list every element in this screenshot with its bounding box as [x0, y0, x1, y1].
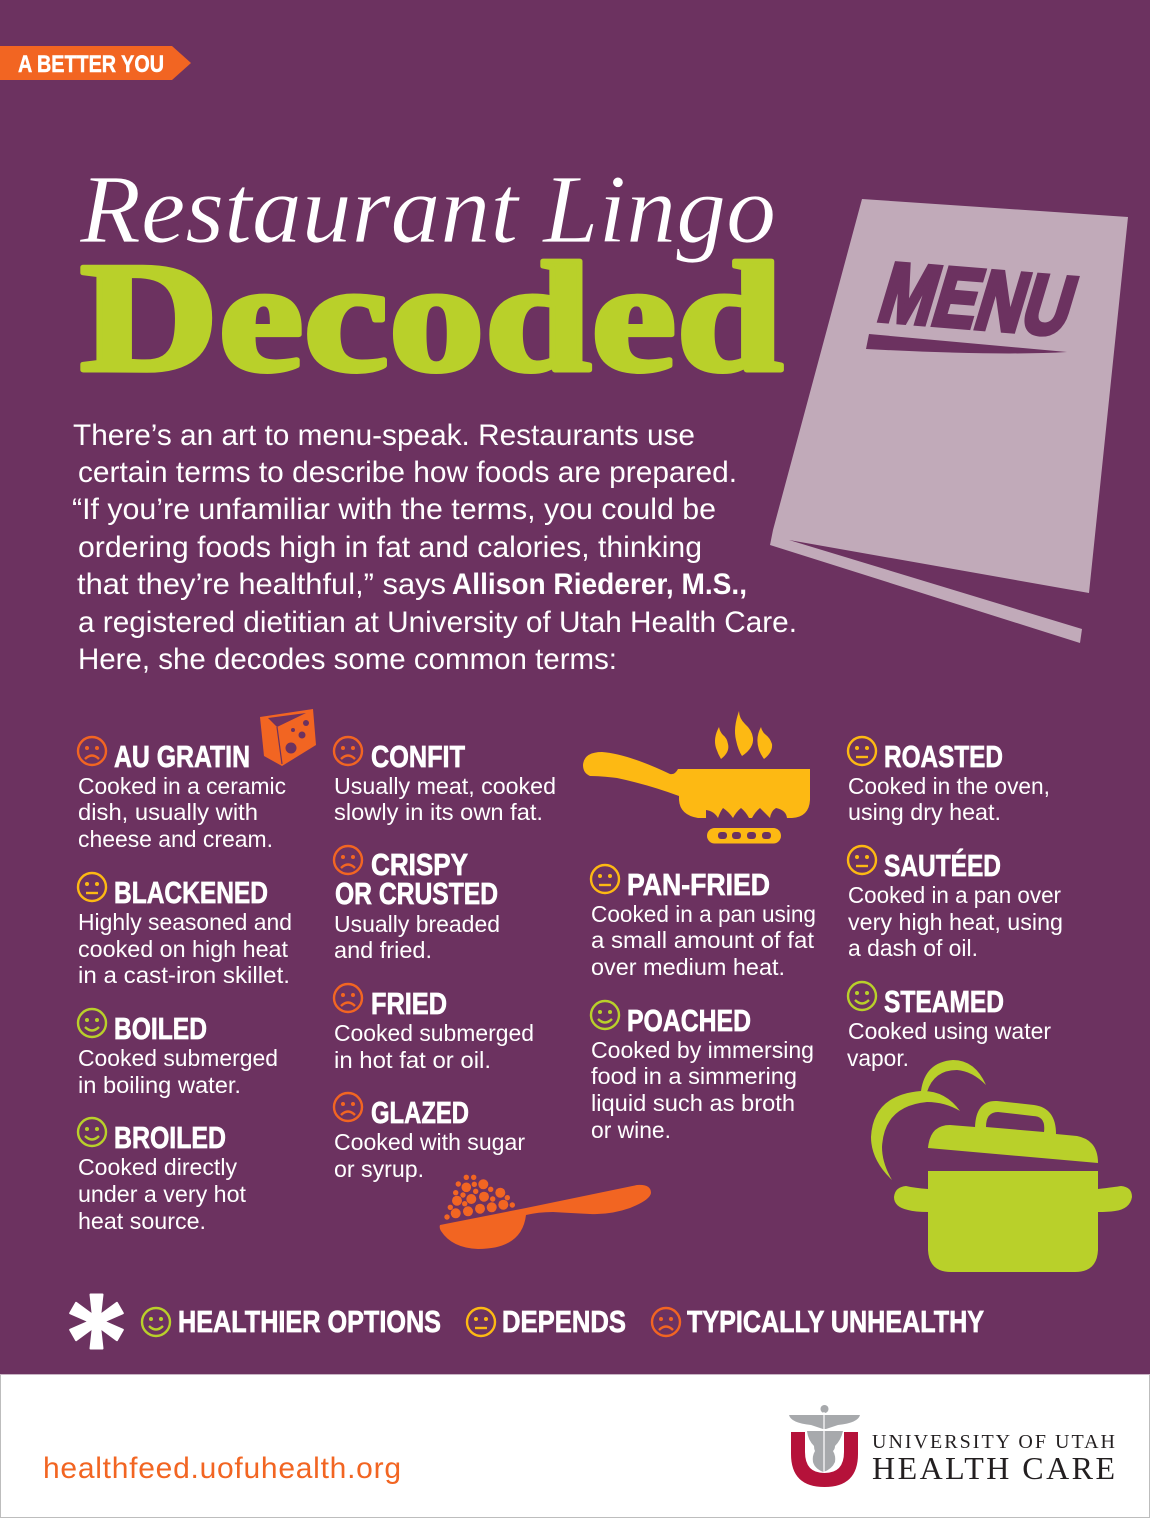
- term: Glazed: [334, 1093, 525, 1182]
- term: Au Gratin: Cooked in a ceramic: [78, 773, 286, 799]
- term: Broiled: Cooked directly: [78, 1154, 237, 1180]
- term: Sauteed: [848, 846, 1063, 961]
- term: Sauteed: Cooked in a pan over: [848, 882, 1061, 908]
- legend: healthier options: HEALTHIER OPTIONS: [178, 1304, 441, 1339]
- term: Au Gratin: AU GRATIN: [114, 739, 250, 774]
- title: Restaurant Lingo: [79, 156, 776, 263]
- term: Glazed: GLAZED: [371, 1095, 469, 1130]
- term: Roasted: [848, 737, 1050, 825]
- term: Broiled: heat source.: [78, 1208, 206, 1234]
- footer panel: [0, 1374, 1150, 1518]
- term: Crispy or Crusted: CRISPY: [371, 847, 468, 882]
- term: Roasted: Cooked in the oven,: [848, 773, 1050, 799]
- term: Steamed: vapor.: [847, 1045, 909, 1071]
- intro text: [72, 419, 797, 676]
- intro text: a registered dietitian at University of Utah Health Care.: [78, 606, 797, 639]
- term: Broiled: [78, 1118, 246, 1234]
- term: Roasted: using dry heat.: [848, 799, 1001, 825]
- intro text: Here, she decodes some common terms:: [78, 643, 617, 676]
- term: Au Gratin: [78, 737, 286, 852]
- term: Steamed: STEAMED: [884, 984, 1004, 1019]
- term: Poached: [591, 1001, 814, 1143]
- term: Blackened: Highly seasoned and: [78, 909, 292, 935]
- icon: asterisk: [70, 1294, 123, 1348]
- legend: typically unhealthy: TYPICALLY UNHEALTHY: [687, 1304, 984, 1339]
- term: Blackened: cooked on high heat: [78, 936, 288, 962]
- term: Pan-Fried: [591, 865, 816, 980]
- icon: cheese: [260, 709, 316, 766]
- footer url: healthfeed.uofuhealth.org: [43, 1452, 401, 1485]
- title: [79, 156, 783, 404]
- term: Boiled: in boiling water.: [78, 1072, 241, 1098]
- banner: A Better You: A BETTER YOU: [18, 51, 164, 78]
- term: Fried: in hot fat or oil.: [334, 1047, 491, 1073]
- icon: menu: [770, 199, 1128, 643]
- icon: frying pan on burner: [583, 711, 810, 844]
- term: Boiled: [78, 1009, 278, 1098]
- term: Sauteed: SAUTÉED: [884, 848, 1001, 883]
- term: Glazed: Cooked with sugar: [334, 1129, 525, 1155]
- intro text: “If you’re unfamiliar with the terms, you could be: [72, 493, 716, 526]
- term: Poached: Cooked by immersing: [591, 1037, 814, 1063]
- term: Steamed: [847, 982, 1051, 1071]
- term: Pan-Fried: Cooked in a pan using: [591, 901, 816, 927]
- term: Roasted: ROASTED: [884, 739, 1003, 774]
- icon: spoon: [440, 1175, 651, 1249]
- term: Confit: Usually meat, cooked: [334, 773, 556, 799]
- term: Confit: [334, 737, 556, 825]
- term: Poached: liquid such as broth: [591, 1090, 795, 1116]
- legend: [70, 1294, 984, 1348]
- term: Fried: [334, 984, 534, 1073]
- intro text: ordering foods high in fat and calories, thinking: [78, 531, 702, 564]
- term: Au Gratin: dish, usually with: [78, 799, 258, 825]
- term: Confit: CONFIT: [371, 739, 465, 774]
- term: Blackened: [78, 873, 292, 988]
- term: Boiled: Cooked submerged: [78, 1045, 278, 1071]
- term: Pan-Fried: a small amount of fat: [591, 927, 814, 953]
- term: Crispy or Crusted: Usually breaded: [334, 911, 500, 937]
- term: Fried: Cooked submerged: [334, 1020, 534, 1046]
- term: Blackened: BLACKENED: [114, 875, 268, 910]
- term: Poached: food in a simmering: [591, 1063, 797, 1089]
- term: Boiled: BOILED: [114, 1011, 207, 1046]
- term: Sauteed: a dash of oil.: [848, 935, 978, 961]
- term: Au Gratin: cheese and cream.: [78, 826, 273, 852]
- term: Blackened: in a cast-iron skillet.: [78, 962, 290, 988]
- intro text: Allison Riederer, M.S.,: [452, 568, 747, 601]
- term: Poached: or wine.: [591, 1117, 671, 1143]
- intro text: There’s an art to menu-speak. Restaurants use: [73, 419, 695, 452]
- term: Confit: slowly in its own fat.: [334, 799, 543, 825]
- legend: depends: DEPENDS: [502, 1304, 626, 1339]
- term: Crispy or Crusted: [334, 846, 500, 963]
- term: Broiled: BROILED: [114, 1120, 226, 1155]
- logo: University of Utah Health Care: HEALTH CARE: [872, 1450, 1115, 1486]
- term: Pan-Fried: over medium heat.: [591, 954, 785, 980]
- intro text: certain terms to describe how foods are prepared.: [78, 456, 737, 489]
- title: Decoded: [80, 230, 783, 404]
- icon: steaming pot: [871, 1060, 1132, 1272]
- term: Pan-Fried: PAN-FRIED: [627, 867, 770, 902]
- intro text: that they’re healthful,” says: [77, 568, 446, 601]
- icon: menu: MENU: [870, 245, 1087, 353]
- term: Poached: POACHED: [627, 1003, 751, 1038]
- term: Sauteed: very high heat, using: [848, 909, 1063, 935]
- logo: University of Utah Health Care: UNIVERSITY OF UTAH: [872, 1431, 1115, 1453]
- logo: University of Utah Health Care: [789, 1405, 1115, 1487]
- term: Broiled: under a very hot: [78, 1181, 246, 1207]
- term: Crispy or Crusted: OR CRUSTED: [335, 876, 498, 911]
- term: Crispy or Crusted: and fried.: [334, 937, 432, 963]
- term: Steamed: Cooked using water: [848, 1018, 1051, 1044]
- legend: depends: [467, 1304, 626, 1339]
- term: Glazed: or syrup.: [334, 1156, 424, 1182]
- term: Fried: FRIED: [371, 986, 447, 1021]
